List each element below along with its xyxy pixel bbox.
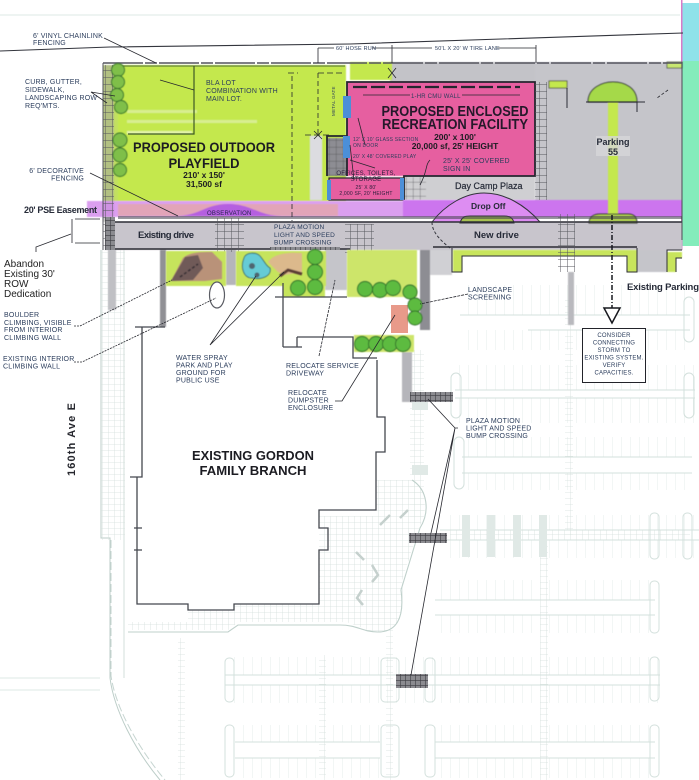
pedestrian walkways — [178, 295, 690, 780]
heading: proposed outdoor playfield: PROPOSED OUTDOOR — [133, 139, 275, 155]
note: boulder climbing: CLIMBING, VISIBLE — [4, 320, 72, 327]
callout: consider connecting storm: EXISTING SYSTEM. — [584, 356, 644, 362]
icon: existing climbing wall ellipse — [210, 282, 224, 308]
note: offices toilets storage: 25' X 80' — [356, 185, 376, 191]
note: relocate service driveway: RELOCATE SERVICE — [286, 363, 359, 370]
note: landscape screening: SCREENING — [468, 294, 511, 302]
note: covered play: 20' X 48' COVERED PLAY — [353, 154, 417, 160]
paved parking and drive area — [105, 62, 682, 402]
note: BLA lot combination: MAIN LOT. — [206, 96, 242, 103]
trees — [110, 64, 422, 352]
heading: proposed outdoor playfield: PLAYFIELD — [168, 155, 240, 171]
heading: proposed enclosed recreation facility: 200' x 100' — [434, 132, 476, 142]
note: decorative fencing: FENCING — [51, 176, 84, 182]
note: water spray park: WATER SPRAY — [176, 355, 228, 362]
callout: consider connecting storm: VERIFY — [603, 363, 625, 369]
note: water spray park: PUBLIC USE — [176, 378, 220, 384]
note: offices toilets storage: STORAGE — [351, 177, 381, 183]
note: plaza motion light and speed bump crossing: BUMP CROSSING — [274, 240, 332, 246]
label: drop off: Drop Off — [471, 201, 506, 211]
note: BLA lot combination: BLA LOT — [206, 80, 236, 87]
note: plaza motion light and speed bump crossing: PLAZA MOTION — [274, 224, 325, 231]
label: abandon existing ROW dedication: ROW — [4, 279, 29, 290]
label: parking 55 — [596, 136, 630, 157]
heading: proposed outdoor playfield: 31,500 sf — [186, 179, 222, 189]
label: abandon existing ROW dedication: Existing 30' — [4, 269, 55, 280]
icon: dumpster enclosure — [391, 305, 408, 333]
facility walls — [327, 82, 535, 200]
callout: consider connecting storm: CONSIDER — [597, 333, 631, 339]
note: water spray park: GROUND FOR — [176, 370, 226, 377]
dimension label: tire lane: 50'L X 20' W TIRE LANE — [435, 46, 500, 52]
heading: proposed enclosed recreation facility — [382, 104, 528, 151]
note: existing interior climbing wall: EXISTING INTERIOR — [3, 356, 74, 363]
label: abandon existing ROW dedication: Abandon — [4, 259, 44, 270]
heading: proposed enclosed recreation facility: PROPOSED ENCLOSED — [382, 104, 528, 120]
panel: proposed enclosed recreation facility — [327, 82, 535, 200]
storm connection arrow — [604, 215, 620, 323]
leader lines — [36, 38, 668, 675]
note: existing interior climbing wall: CLIMBING WALL — [3, 364, 60, 370]
bump crossings on drive — [105, 82, 682, 688]
note: plaza motion light and speed bump crossing: LIGHT AND SPEED — [274, 232, 335, 239]
sidewalk grid along 160th Ave — [101, 250, 125, 540]
entry plaza — [128, 480, 426, 632]
drop off area — [432, 193, 540, 248]
note: boulder climbing: CLIMBING WALL — [4, 335, 61, 342]
heading: existing gordon family branch: EXISTING GORDON — [192, 448, 314, 463]
heading: proposed enclosed recreation facility: 20,000 sf, 25' HEIGHT — [412, 141, 499, 151]
callout: consider connecting storm: CAPACITIES. — [594, 370, 634, 376]
label: 160th Ave E: 160th Ave E — [66, 403, 78, 476]
grey parking stall blocks — [412, 402, 547, 557]
callout: consider connecting storm: STORM TO — [598, 348, 631, 354]
note: curb gutter sidewalk: LANDSCAPING ROW — [25, 95, 97, 102]
note: relocate service driveway: DRIVEWAY — [286, 370, 324, 378]
dimension label: 60 hose run: 60' HOSE RUN — [336, 46, 376, 52]
callout: consider connecting storm — [582, 328, 646, 382]
label: parking 55: 55 — [608, 147, 618, 157]
note: boulder climbing: FROM INTERIOR — [4, 327, 63, 334]
icon: water spray park — [242, 253, 302, 279]
note: relocate dumpster enclosure: RELOCATE — [288, 390, 327, 397]
note: vinyl chainlink fencing: FENCING — [33, 40, 66, 47]
note: curb gutter sidewalk: CURB, GUTTER, — [25, 79, 82, 86]
note: BLA lot combination: COMBINATION WITH — [206, 88, 278, 95]
note: landscape screening: LANDSCAPE — [468, 287, 512, 294]
label: 20' PSE easement: 20' PSE Easement — [24, 205, 97, 215]
note: glass section: ON DOOR — [353, 143, 378, 149]
20' PSE easement band — [87, 200, 682, 217]
heading: existing gordon family branch — [192, 448, 314, 478]
existing gordon family branch outline — [130, 283, 385, 610]
note: water spray park: PARK AND PLAY — [176, 362, 233, 370]
note: boulder climbing: BOULDER — [4, 312, 39, 319]
existing parking field — [178, 285, 699, 780]
note: offices toilets storage: OFFICES, TOILETS, — [336, 171, 396, 177]
glass sections — [327, 96, 404, 200]
panel: proposed outdoor playfield lawn — [103, 62, 392, 222]
right edge colour strip — [681, 0, 699, 250]
note: curb gutter sidewalk: REQ'MTS. — [25, 103, 60, 110]
curb lines — [103, 62, 682, 272]
note: offices toilets storage: 2,000 SF, 20' HEIGHT — [339, 191, 393, 197]
label: abandon existing ROW dedication: Dedication — [4, 289, 51, 300]
parking islands — [453, 62, 682, 272]
pavers: left sidewalk hatch — [103, 65, 114, 250]
note: plaza motion lower crossing: LIGHT AND SPEED — [466, 426, 532, 432]
note: metal gate: METAL GATE — [331, 86, 336, 116]
label: day camp plaza: Day Camp Plaza — [455, 181, 523, 191]
note: covered sign in: SIGN IN — [443, 166, 470, 173]
label: new drive: New drive — [474, 230, 519, 241]
note: relocate dumpster enclosure: ENCLOSURE — [288, 405, 333, 412]
heading: proposed enclosed recreation facility: RECREATION FACILITY — [382, 117, 528, 133]
note: relocate dumpster enclosure: DUMPSTER — [288, 398, 329, 404]
property line — [0, 33, 683, 51]
heading: existing gordon family branch: FAMILY BRANCH — [200, 463, 306, 478]
heading: proposed outdoor playfield — [133, 139, 275, 189]
note: vinyl chainlink fencing: 6' VINYL CHAINLINK — [33, 33, 103, 40]
note: plaza motion lower crossing: PLAZA MOTION — [466, 418, 520, 425]
note: glass section: 12' X 10' GLASS SECTION — [353, 137, 419, 143]
note: CMU wall: 1-HR CMU WALL — [411, 94, 461, 100]
label: existing parking: Existing Parking — [627, 282, 699, 293]
note: curb gutter sidewalk: SIDEWALK, — [25, 87, 65, 94]
note: decorative fencing: 6' DECORATIVE — [29, 168, 84, 175]
landscape garden beds — [166, 250, 417, 352]
icon: boulder climbing rocks — [171, 252, 222, 281]
label: existing drive: Existing drive — [138, 230, 194, 241]
callout: consider connecting storm: CONNECTING — [593, 341, 635, 347]
parking rows — [225, 285, 699, 778]
heading: proposed outdoor playfield: 210' x 150' — [183, 170, 225, 180]
label: observation: OBSERVATION — [207, 211, 252, 217]
note: plaza motion lower crossing: BUMP CROSSING — [466, 433, 528, 440]
label: parking 55: Parking — [596, 137, 630, 147]
note: covered sign in: 25' X 25' COVERED — [443, 158, 510, 165]
